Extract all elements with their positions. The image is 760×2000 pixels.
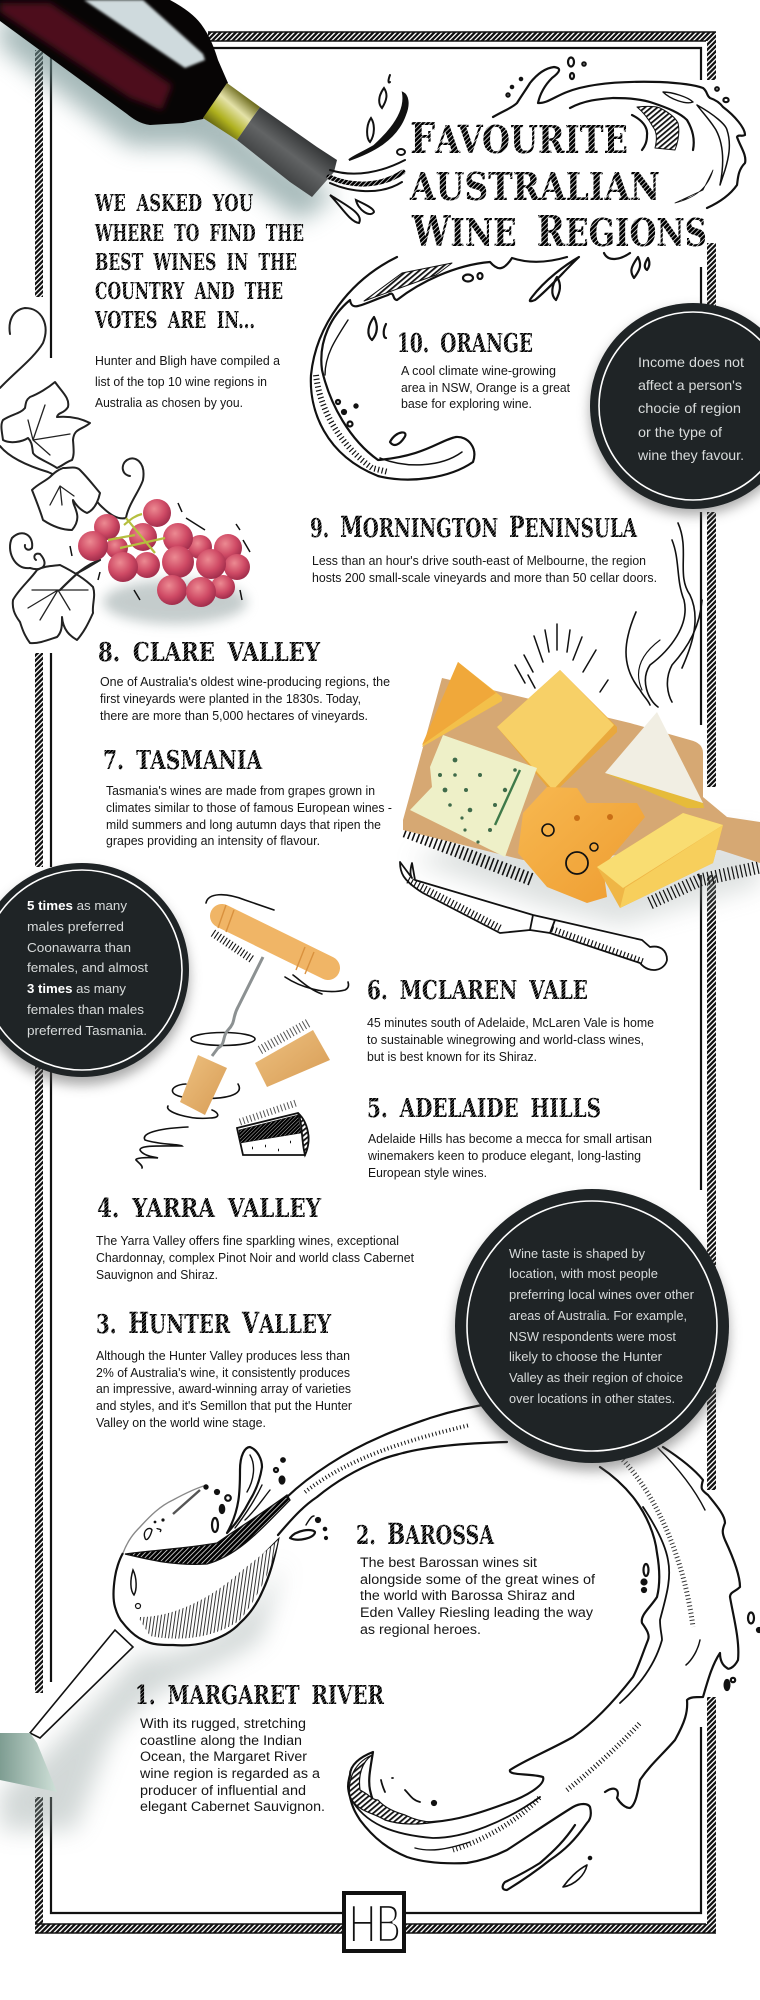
circle callout: gender: Coonawarra than — [27, 940, 131, 955]
region 8: Clare Valley: there are more than 5,000 hectares of vineyards. — [100, 709, 368, 723]
region 3: Hunter Valley — [96, 1306, 352, 1430]
circle callout: income — [590, 303, 760, 515]
circle callout: gender: preferred Tasmania. — [27, 1023, 147, 1038]
intro text — [95, 354, 280, 410]
region 2: Barossa: the world with Barossa Shiraz and — [360, 1588, 575, 1603]
circle callout: location: likely to choose the Hunter — [509, 1349, 663, 1364]
circle callout: location — [455, 1189, 729, 1471]
region 7: Tasmania: Tasmania's wines are made from grapes grown in — [106, 784, 375, 798]
blue cheese — [410, 735, 537, 857]
region 8: Clare Valley: 8. CLARE VALLEY — [98, 638, 320, 668]
radiating lines above cheese — [515, 624, 608, 692]
region 4: Yarra Valley: The Yarra Valley offers fine sparkling wines, exceptional — [96, 1234, 399, 1248]
region 10: Orange — [397, 329, 571, 411]
region 1: Margaret River: 1. MARGARET RIVER — [135, 1681, 384, 1711]
region 3: Hunter Valley: Valley on the world wine stage. — [96, 1416, 266, 1430]
circle callout: location: Valley as their region of choice — [509, 1370, 683, 1385]
splash above glass — [204, 1447, 327, 1540]
vine stem — [60, 560, 100, 590]
region 3: Hunter Valley: Although the Hunter Valley produces less than — [96, 1349, 350, 1363]
vine with leaves — [0, 308, 144, 643]
circle callout: location: location, with most people — [509, 1266, 658, 1281]
region 4: Yarra Valley — [96, 1194, 415, 1282]
region 8: Clare Valley: first vineyards were planted in the 1830s. Today, — [100, 692, 361, 706]
region 2: Barossa: Eden Valley Riesling leading the way — [360, 1605, 593, 1620]
grapes — [70, 499, 250, 624]
region 1: Margaret River: producer of influential and — [140, 1783, 306, 1798]
region 2: Barossa: alongside some of the great wines of — [360, 1572, 595, 1587]
region 9: Mornington Peninsula: hosts 200 small-scale vineyards and more than 50 cellar doors. — [312, 571, 657, 585]
region 1: Margaret River — [135, 1681, 384, 1814]
region 9: Mornington Peninsula: 9. MORNINGTON PENINSULA — [310, 510, 638, 544]
region 8: Clare Valley: One of Australia's oldest wine-producing regions, the — [100, 675, 390, 689]
glass base — [0, 1733, 57, 1792]
corkscrew handle — [222, 916, 328, 968]
region 6: McLaren Vale: 45 minutes south of Adelaide, McLaren Vale is home — [367, 1016, 654, 1030]
cork 1 — [180, 1055, 227, 1115]
intro heading — [94, 190, 304, 334]
cork 2 — [255, 1030, 330, 1087]
circle callout: location: NSW respondents were most — [509, 1329, 676, 1344]
region 2: Barossa: 2. BAROSSA — [356, 1517, 495, 1551]
region 5: Adelaide Hills — [367, 1094, 652, 1180]
region 2: Barossa — [356, 1517, 595, 1637]
region 4: Yarra Valley: Chardonnay, complex Pinot Noir and world class Cabernet — [96, 1251, 415, 1265]
region 1: Margaret River: elegant Cabernet Sauvignon. — [140, 1799, 325, 1814]
corkscrew and corks — [136, 895, 349, 1168]
region 3: Hunter Valley: 3. HUNTER VALLEY — [96, 1306, 331, 1340]
brie — [605, 712, 704, 808]
vine leaf 1 — [1, 382, 90, 468]
circle callout: location: preferring local wines over other — [509, 1287, 695, 1302]
sketched cork — [237, 1113, 309, 1155]
glass bowl — [114, 1540, 278, 1645]
region 5: Adelaide Hills: winemakers keen to produce elegant, long-lasting — [367, 1149, 641, 1163]
intro heading: WHERE TO FIND THE — [94, 220, 304, 247]
cheese board — [403, 662, 760, 925]
region 9: Mornington Peninsula: Less than an hour's drive south-east of Melbourne, the region — [312, 554, 646, 568]
region 9: Mornington Peninsula — [310, 510, 657, 585]
splash: left of title — [349, 75, 408, 160]
circle callout: location: Wine taste is shaped by — [509, 1246, 645, 1261]
region 5: Adelaide Hills: European style wines. — [368, 1166, 487, 1180]
circle callout: income: or the type of — [638, 424, 722, 440]
circle callout: income: wine they favour. — [637, 447, 744, 463]
circle callout: location: over locations in other states. — [509, 1391, 675, 1406]
intro heading: VOTES ARE IN... — [94, 307, 255, 334]
region 5: Adelaide Hills: Adelaide Hills has become a mecca for small artisan — [368, 1132, 652, 1146]
yellow wedge — [597, 813, 723, 908]
region 4: Yarra Valley: Sauvignon and Shiraz. — [96, 1268, 218, 1282]
big wine wave — [204, 1402, 760, 1890]
glass stem — [30, 1630, 133, 1738]
region 10: Orange: 10. ORANGE — [397, 329, 533, 359]
intro text: Australia as chosen by you. — [95, 396, 243, 410]
region 7: Tasmania: grapes providing an intensity of flavour. — [106, 834, 320, 848]
circle callout: gender — [0, 863, 189, 1085]
region 1: Margaret River: wine region is regarded as a — [139, 1766, 321, 1781]
region 2: Barossa: The best Barossan wines sit — [360, 1555, 537, 1570]
region 3: Hunter Valley: 2% of Australia's wine, it consistently produces — [96, 1366, 350, 1380]
region 6: McLaren Vale: 6. MCLAREN VALE — [367, 976, 588, 1006]
region 6: McLaren Vale: but is best known for its Shiraz. — [367, 1050, 537, 1064]
region 7: Tasmania: mild summers and long autumn days that ripen the — [106, 818, 381, 832]
circle callout: gender: 5 times as many — [27, 898, 128, 913]
title: AUSTRALIAN — [409, 164, 660, 209]
region 8: Clare Valley — [98, 638, 390, 723]
region 1: Margaret River: coastline along the Indian — [140, 1733, 302, 1748]
cheese wedge 2 — [497, 670, 617, 794]
region 1: Margaret River: Ocean, the Margaret River — [140, 1749, 308, 1764]
circle callout: income: chocie of region — [638, 400, 741, 416]
splash: top right of title — [493, 58, 745, 208]
region 5: Adelaide Hills: 5. ADELAIDE HILLS — [367, 1094, 601, 1124]
wine bottle — [0, 0, 337, 221]
region 10: Orange: base for exploring wine. — [401, 397, 532, 411]
HB logo — [344, 1893, 404, 1954]
title — [409, 114, 707, 256]
region 10: Orange: A cool climate wine-growing — [401, 364, 556, 378]
region 3: Hunter Valley: an impressive, award-winning array of varieties — [96, 1382, 351, 1396]
intro text: Hunter and Bligh have compiled a — [95, 354, 280, 368]
region 6: McLaren Vale: to sustainable winegrowing and world-class wines, — [367, 1033, 644, 1047]
splash: bottle mouth — [329, 160, 405, 223]
circle callout: gender: females, and almost — [27, 960, 148, 975]
wine glass — [0, 1485, 290, 1830]
cheese wedge 1 — [422, 662, 502, 747]
circle callout: gender: males preferred — [27, 919, 124, 934]
circle callout: gender: females than males — [27, 1002, 145, 1017]
cheese knife — [400, 862, 667, 970]
region 7: Tasmania: climates similar to those of famous European wines - — [106, 801, 392, 815]
vine leaf 2 — [32, 468, 100, 530]
intro heading: WE ASKED YOU — [94, 190, 253, 217]
vine leaf 3 — [13, 565, 94, 643]
region 7: Tasmania: 7. TASMANIA — [103, 746, 263, 776]
circle callout: gender: 3 times as many — [27, 981, 126, 996]
round orange cheese — [518, 787, 645, 903]
corkscrew stem — [212, 957, 263, 1056]
splash: below title — [311, 253, 649, 480]
region 4: Yarra Valley: 4. YARRA VALLEY — [97, 1194, 321, 1224]
region 10: Orange: area in NSW, Orange is a great — [401, 381, 571, 395]
intro text: list of the top 10 wine regions in — [95, 375, 267, 389]
intro heading: BEST WINES IN THE — [95, 249, 297, 276]
steam lines — [626, 523, 702, 707]
region 1: Margaret River: With its rugged, stretching — [140, 1716, 306, 1731]
region 3: Hunter Valley: and styles, and it's Semillon that put the Hunter — [96, 1399, 352, 1413]
title: FAVOURITE — [410, 114, 628, 163]
title: WINE REGIONS — [411, 207, 707, 256]
region 6: McLaren Vale — [367, 976, 654, 1064]
intro heading: COUNTRY AND THE — [95, 278, 283, 305]
circle callout: location: areas of Australia. For example, — [509, 1308, 687, 1323]
vine tendril — [0, 308, 144, 575]
circle callout: income: affect a person's — [638, 377, 742, 393]
region 2: Barossa: as regional heroes. — [360, 1622, 481, 1637]
circle callout: income: Income does not — [638, 354, 744, 370]
region 7: Tasmania — [103, 746, 392, 848]
HB logo: HB — [349, 1894, 401, 1954]
